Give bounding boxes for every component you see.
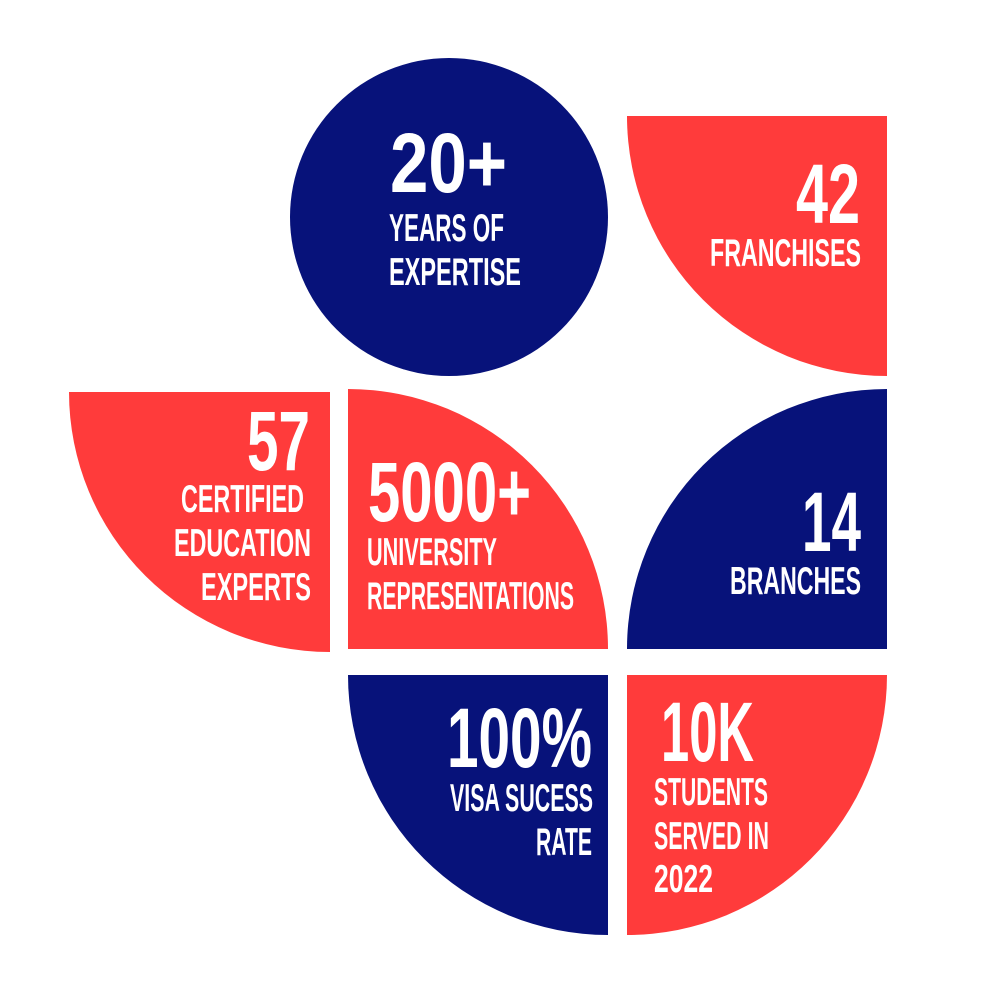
panel: years of expertise <box>290 58 608 376</box>
label: years of expertise: YEARS OF <box>389 207 504 250</box>
label: students served in 2022: 2022 <box>654 858 713 901</box>
number: 5000+: 5000+ <box>368 445 531 539</box>
red quarter shape <box>627 116 887 376</box>
panel: students served <box>627 675 887 935</box>
label: certified education experts: EDUCATION <box>174 522 311 565</box>
number: 20+: 20+ <box>390 116 507 210</box>
panel: university representations <box>348 389 608 649</box>
navy circle <box>290 58 608 376</box>
red quarter shape <box>627 675 887 935</box>
navy quarter shape <box>348 675 608 935</box>
label: visa sucess rate: RATE <box>536 821 592 864</box>
navy quarter shape <box>627 389 887 649</box>
label: university representations: REPRESENTATIONS <box>367 575 574 618</box>
label: students served in 2022: STUDENTS <box>654 771 768 814</box>
number: 10K: 10K <box>661 685 754 779</box>
label: franchises: FRANCHISES <box>710 232 861 275</box>
panel: visa success rate <box>348 675 608 935</box>
label: students served in 2022 <box>654 771 769 901</box>
number: 100%: 100% <box>447 691 592 785</box>
number: 57: 57 <box>247 394 310 488</box>
label: certified education experts <box>174 478 311 609</box>
red quarter shape <box>69 392 330 652</box>
label: university representations: UNIVERSITY <box>367 531 497 574</box>
panel: branches <box>627 389 887 649</box>
label: visa sucess rate <box>450 777 593 864</box>
panel: certified education experts <box>69 392 330 652</box>
label: certified education experts: EXPERTS <box>201 566 311 609</box>
label: students served in 2022: SERVED IN <box>654 815 769 858</box>
label: branches: BRANCHES <box>730 560 861 603</box>
panel: franchises <box>627 116 887 376</box>
label: university representations <box>367 531 574 618</box>
label: certified education experts: CERTIFIED <box>181 478 304 521</box>
label: years of expertise <box>389 207 521 294</box>
number: 14: 14 <box>802 475 861 569</box>
label: years of expertise: EXPERTISE <box>389 251 521 294</box>
label: visa sucess rate: VISA SUCESS <box>450 777 593 820</box>
red quarter shape <box>348 389 608 649</box>
number: 42: 42 <box>796 147 860 241</box>
